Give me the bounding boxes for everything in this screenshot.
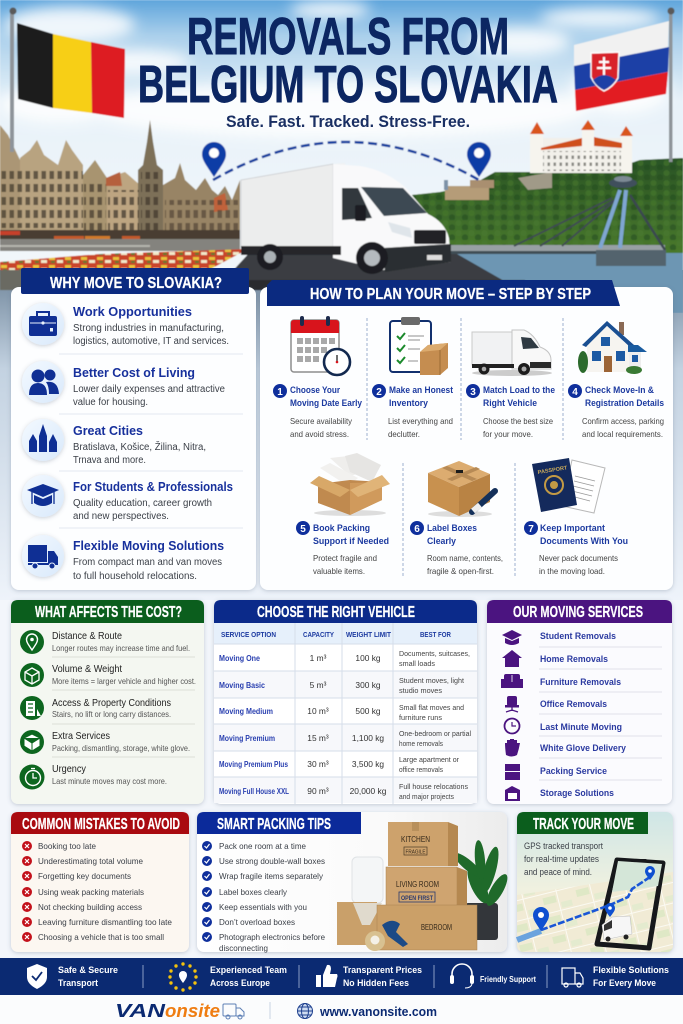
service: furniture removals: Furniture Removals bbox=[540, 677, 621, 687]
step 5: Book Packing bbox=[313, 523, 370, 534]
step 6: Room name, contents, bbox=[427, 553, 503, 563]
service: white glove bbox=[505, 739, 627, 756]
step 5 bbox=[296, 453, 390, 576]
panel: common mistakes bbox=[11, 812, 189, 952]
tips list: Pack one room at a time bbox=[219, 841, 306, 851]
heading: step by step bbox=[267, 280, 620, 306]
cost factor: access bbox=[20, 696, 171, 720]
trust: experienced team: Across Europe bbox=[210, 978, 270, 989]
logo: VANonsite bbox=[115, 1001, 244, 1021]
step 3: Choose the best size bbox=[483, 416, 553, 426]
cost factor: extra services bbox=[20, 730, 190, 754]
step 3: Right Vehicle bbox=[483, 398, 537, 409]
item: great cities bbox=[22, 419, 206, 466]
panel: smart packing tips bbox=[197, 812, 511, 953]
box: kitchen: KITCHEN bbox=[401, 835, 430, 844]
water and road bbox=[0, 249, 683, 313]
title bbox=[138, 8, 558, 114]
sky with clouds bbox=[0, 0, 683, 290]
trust: transparent prices bbox=[316, 965, 422, 989]
row: Moving Medium bbox=[219, 703, 464, 722]
panel: track your move bbox=[517, 812, 673, 952]
service: last minute moving bbox=[504, 718, 622, 734]
heading: mistakes: COMMON MISTAKES TO AVOID bbox=[22, 816, 180, 833]
mistakes list: Not checking building access bbox=[38, 902, 142, 912]
row: Moving One: 1 m³ bbox=[310, 653, 327, 663]
step 7 bbox=[524, 458, 628, 576]
icon: white van bbox=[472, 330, 552, 376]
step 4: Confirm access, parking bbox=[582, 416, 664, 426]
step 4: Registration Details bbox=[585, 398, 664, 409]
step 6: Label Boxes bbox=[427, 523, 477, 534]
cost factor: urgency: Urgency bbox=[52, 763, 87, 775]
item: flexible moving bbox=[22, 535, 224, 582]
trust: experienced team bbox=[168, 962, 287, 992]
item: students and professionals bbox=[22, 475, 233, 522]
table header row bbox=[221, 630, 451, 639]
step 2: List everything and bbox=[388, 416, 453, 426]
item: students and professionals: Quality education, career growth bbox=[73, 498, 212, 509]
item: great cities: Bratislava, Košice, Žilina, Nitra, bbox=[73, 440, 206, 453]
cost factor: volume bbox=[20, 663, 196, 687]
route arc with location pins bbox=[202, 142, 491, 180]
step 4: 4 bbox=[572, 387, 578, 398]
row: Moving Premium: Moving Premium bbox=[219, 734, 275, 743]
mistakes list: Leaving furniture dismantling too late bbox=[38, 917, 172, 927]
step 2: declutter. bbox=[388, 429, 420, 439]
tips list: Wrap fragile items separately bbox=[219, 871, 324, 881]
service: packing bbox=[505, 764, 607, 780]
mistakes list bbox=[22, 841, 172, 942]
icon: house bbox=[578, 321, 647, 374]
row: Moving One: 100 kg bbox=[355, 653, 381, 663]
service: storage bbox=[505, 786, 614, 801]
small box bbox=[337, 902, 382, 945]
item: cost of living: Better Cost of Living bbox=[73, 365, 195, 380]
item: work opportunities: Strong industries in manufacturing, bbox=[73, 323, 224, 334]
trust: safe and secure: Transport bbox=[58, 978, 99, 989]
Belgian flag with pole bbox=[10, 8, 125, 152]
cost factor: volume: Volume & Weight bbox=[52, 663, 122, 675]
row: Moving One bbox=[219, 649, 470, 668]
item: cost of living bbox=[22, 361, 225, 408]
service: storage: Storage Solutions bbox=[540, 788, 614, 798]
step 6: 6 bbox=[414, 524, 420, 535]
box: living room bbox=[386, 867, 467, 908]
row: Moving Medium: Moving Medium bbox=[219, 707, 273, 716]
step 7: in the moving load. bbox=[539, 566, 605, 576]
tips list: Label boxes clearly bbox=[219, 887, 288, 897]
step 3 bbox=[466, 330, 555, 439]
heading: vehicle: CHOOSE THE RIGHT VEHICLE bbox=[257, 604, 415, 621]
row: Moving Full House XXL: Moving Full House XXL bbox=[219, 787, 289, 796]
service: packing: Packing Service bbox=[540, 766, 607, 776]
icon: calendar with clock bbox=[291, 316, 350, 375]
heading: step by step: HOW TO PLAN YOUR MOVE – STEP BY STEP bbox=[310, 286, 591, 303]
tips list: disconnecting bbox=[219, 943, 268, 953]
heading: services bbox=[487, 600, 672, 623]
step 1: Choose Your bbox=[290, 385, 340, 396]
box: kitchen bbox=[388, 822, 458, 866]
step 5: valuable items. bbox=[313, 566, 365, 576]
logo: VANonsite: onsite bbox=[165, 1001, 220, 1021]
heading: why move bbox=[21, 268, 249, 294]
bubble roll bbox=[352, 857, 383, 903]
cost factor: distance bbox=[20, 630, 190, 654]
mistakes list: Using weak packing materials bbox=[38, 887, 144, 897]
tips list: Photograph electronics before bbox=[219, 932, 325, 942]
website with globe: www.vanonsite.com bbox=[319, 1004, 437, 1019]
trust: friendly support: Friendly Support bbox=[480, 975, 536, 984]
table header row: BEST FOR bbox=[420, 630, 451, 639]
heading: vehicle bbox=[214, 600, 477, 623]
step 2: 2 bbox=[376, 387, 382, 398]
item: work opportunities: logistics, automotive, IT and services. bbox=[73, 336, 229, 347]
step 6: Clearly bbox=[427, 536, 457, 547]
step 5: Support if Needed bbox=[313, 536, 389, 547]
step 1: Secure availability bbox=[290, 416, 353, 426]
UFO bridge bbox=[450, 176, 666, 266]
item: cost of living: value for housing. bbox=[73, 397, 148, 408]
row: Moving Premium: 15 m³ bbox=[307, 733, 329, 743]
Slovak hill with trees bbox=[412, 158, 683, 255]
heading: mistakes bbox=[11, 812, 189, 834]
item: flexible moving: to full household relocations. bbox=[73, 571, 197, 582]
row: Moving Medium: Small flat moves and bbox=[399, 703, 464, 712]
row: Moving Full House XXL: and major projects bbox=[399, 792, 454, 801]
row: Moving Premium Plus: 30 m³ bbox=[307, 759, 329, 769]
map background bbox=[517, 872, 673, 952]
cost factor: access: Access & Property Conditions bbox=[52, 697, 171, 709]
row: Moving Full House XXL bbox=[219, 782, 468, 801]
Bratislava castle bbox=[530, 120, 633, 173]
box: living room: LIVING ROOM bbox=[396, 880, 439, 889]
trust: flexible solutions: For Every Move bbox=[593, 978, 656, 989]
panel: what affects the cost bbox=[11, 600, 204, 804]
cost factor: distance: Longer routes may increase time and fuel. bbox=[52, 644, 190, 653]
row: Moving Basic: studio moves bbox=[399, 686, 442, 695]
row: Moving Premium Plus: Moving Premium Plus bbox=[219, 760, 288, 769]
table header row: CAPACITY bbox=[303, 630, 334, 639]
row: Moving Basic: 5 m³ bbox=[310, 680, 327, 690]
panel: choose the right vehicle table bbox=[214, 600, 477, 804]
logo: VANonsite: VAN bbox=[115, 1001, 166, 1021]
trust: safe and secure: Safe & Secure bbox=[58, 965, 118, 976]
row: Moving Basic: Moving Basic bbox=[219, 681, 265, 690]
row: Moving Medium: 10 m³ bbox=[307, 706, 329, 716]
white removals van bbox=[241, 163, 451, 274]
step 7: Keep Important bbox=[540, 523, 606, 534]
icon: clipboard and box bbox=[390, 317, 448, 375]
trust bar bbox=[0, 958, 683, 995]
row: Moving Premium Plus: 3,500 kg bbox=[352, 759, 384, 769]
trust: flexible solutions bbox=[562, 965, 669, 989]
row: Moving Basic: Student moves, light bbox=[399, 676, 465, 685]
row: Moving One: Documents, suitcases, bbox=[399, 649, 470, 658]
trust: friendly support bbox=[450, 964, 536, 988]
item: great cities: Great Cities bbox=[73, 423, 143, 438]
item: flexible moving: Flexible Moving Solutions bbox=[73, 538, 224, 553]
row: Moving Premium Plus: office removals bbox=[399, 765, 443, 774]
icon: open box with bubble wrap bbox=[310, 453, 390, 516]
panel: why move to Slovakia bbox=[11, 268, 256, 590]
step 6: fragile & open-first. bbox=[427, 566, 494, 576]
heading: cost: WHAT AFFECTS THE COST? bbox=[35, 604, 182, 621]
row: Moving Basic bbox=[219, 676, 465, 695]
step 3: for your move. bbox=[483, 429, 533, 439]
heading: packing tips bbox=[197, 812, 361, 834]
illustration: stacked moving boxes, plant and tape bbox=[337, 822, 511, 951]
icon: taped box and marker bbox=[428, 461, 495, 517]
tracking text: and peace of mind. bbox=[524, 867, 592, 877]
tips list: Use strong double-wall boxes bbox=[219, 856, 325, 866]
step 1: and avoid stress. bbox=[290, 429, 349, 439]
table header row: WEIGHT LIMIT bbox=[346, 630, 391, 639]
tips list bbox=[202, 841, 325, 953]
trust: experienced team: Experienced Team bbox=[210, 965, 287, 976]
service: student removals bbox=[502, 630, 616, 645]
step 1: Moving Date Early bbox=[290, 398, 363, 409]
service: furniture removals bbox=[501, 674, 621, 688]
blue road and dashed route bbox=[517, 866, 655, 940]
service: office removals bbox=[505, 696, 607, 712]
mistakes list: Booking too late bbox=[38, 841, 96, 851]
title: REMOVALS FROM bbox=[187, 8, 509, 66]
step 3: 3 bbox=[470, 387, 476, 398]
mistakes list: Choosing a vehicle that is too small bbox=[38, 932, 164, 942]
heading: cost bbox=[11, 600, 204, 623]
tracking text: GPS tracked transport bbox=[524, 841, 603, 851]
step 2: Make an Honest bbox=[389, 385, 454, 396]
step 3: Match Load to the bbox=[483, 385, 555, 396]
step 2: Inventory bbox=[389, 398, 429, 409]
service: student removals: Student Removals bbox=[540, 631, 616, 641]
row: Moving One: small loads bbox=[399, 659, 435, 668]
step 1 bbox=[273, 316, 363, 439]
row: Moving Full House XXL: 20,000 kg bbox=[350, 786, 387, 796]
cost factor: extra services: Packing, dismantling, storage, white glove. bbox=[52, 744, 190, 753]
row: Moving Premium Plus bbox=[219, 755, 459, 774]
tips list: Don’t overload boxes bbox=[219, 917, 295, 927]
step 5: Protect fragile and bbox=[313, 553, 377, 563]
box: kitchen: FRAGILE bbox=[406, 850, 426, 856]
row: Moving Medium: furniture runs bbox=[399, 713, 442, 722]
step 4: and local requirements. bbox=[582, 429, 663, 439]
item: cost of living: Lower daily expenses and attractive bbox=[73, 384, 225, 395]
Belgian buildings bbox=[0, 120, 240, 251]
row: Moving Premium: home removals bbox=[399, 739, 443, 748]
trust: transparent prices: Transparent Prices bbox=[343, 965, 422, 976]
step 4: Check Move-In & bbox=[585, 385, 654, 396]
plant bbox=[451, 840, 511, 940]
row: Moving Premium: One-bedroom or partial bbox=[399, 729, 471, 738]
step 4 bbox=[568, 321, 664, 439]
item: students and professionals: and new perspectives. bbox=[73, 511, 169, 522]
cost factor: extra services: Extra Services bbox=[52, 730, 110, 742]
service: last minute moving: Last Minute Moving bbox=[540, 722, 622, 732]
row: Moving Medium: 500 kg bbox=[355, 706, 381, 716]
Slovak flag with pole bbox=[574, 8, 674, 162]
step 7: 7 bbox=[528, 524, 534, 535]
item: students and professionals: For Students & Professionals bbox=[73, 479, 233, 494]
tracking text: for real-time updates bbox=[524, 854, 599, 864]
row: Moving Premium: 1,100 kg bbox=[352, 733, 384, 743]
service: white glove: White Glove Delivery bbox=[540, 743, 627, 753]
subtitle: Safe. Fast. Tracked. Stress-Free. bbox=[226, 112, 470, 131]
row: Moving Full House XXL: 90 m³ bbox=[307, 786, 329, 796]
box: bedroom: BEDROOM bbox=[421, 923, 452, 932]
step 1: 1 bbox=[277, 387, 283, 398]
row: Moving Full House XXL: Full house relocations bbox=[399, 782, 468, 791]
row: Moving Basic: 300 kg bbox=[355, 680, 381, 690]
trust: safe and secure bbox=[27, 964, 118, 989]
heading: why move: WHY MOVE TO SLOVAKIA? bbox=[50, 275, 222, 292]
service: home removals: Home Removals bbox=[540, 654, 608, 664]
mistakes list: Forgetting key documents bbox=[38, 871, 131, 881]
footer bbox=[0, 995, 683, 1024]
item: great cities: Trnava and more. bbox=[73, 455, 146, 466]
icon: passport and document: PASSPORT bbox=[537, 465, 568, 476]
item: flexible moving: From compact man and van moves bbox=[73, 557, 222, 568]
box: bedroom bbox=[377, 905, 477, 950]
row: Moving One: Moving One bbox=[219, 654, 260, 663]
table header row: SERVICE OPTION bbox=[221, 630, 276, 639]
service: office removals: Office Removals bbox=[540, 699, 607, 709]
mistakes list: Underestimating total volume bbox=[38, 856, 143, 866]
cost factor: distance: Distance & Route bbox=[52, 630, 122, 642]
row: Moving Premium bbox=[219, 729, 471, 748]
panel: our moving services bbox=[487, 600, 672, 804]
step 7: Documents With You bbox=[540, 536, 628, 547]
tracking text bbox=[524, 841, 603, 877]
cost factor: access: Stairs, no lift or long carry distances. bbox=[52, 710, 171, 719]
step 6 bbox=[410, 461, 503, 576]
cost factor: volume: More items = larger vehicle and higher cost. bbox=[52, 677, 196, 686]
cost factor: urgency bbox=[20, 763, 167, 790]
heading: track bbox=[517, 812, 648, 834]
step 2 bbox=[372, 317, 454, 439]
trust: flexible solutions: Flexible Solutions bbox=[593, 965, 669, 976]
row: Moving Premium Plus: Large apartment or bbox=[399, 755, 459, 764]
step 5: 5 bbox=[300, 524, 306, 535]
trust: transparent prices: No Hidden Fees bbox=[343, 978, 409, 989]
hero scene bbox=[0, 0, 683, 313]
item: work opportunities: Work Opportunities bbox=[73, 304, 192, 319]
tape gun and roll bbox=[365, 921, 408, 951]
step 7: Never pack documents bbox=[539, 553, 618, 563]
tips list: Keep essentials with you bbox=[219, 902, 307, 912]
heading: packing tips: SMART PACKING TIPS bbox=[217, 816, 331, 833]
service: home removals bbox=[502, 650, 608, 667]
panel: how to plan your move bbox=[260, 280, 673, 590]
cost factor: urgency: Last minute moves may cost more. bbox=[52, 777, 167, 786]
box: living room: OPEN FIRST bbox=[401, 895, 433, 902]
item: work opportunities bbox=[22, 303, 229, 347]
phone with map bbox=[597, 859, 663, 948]
